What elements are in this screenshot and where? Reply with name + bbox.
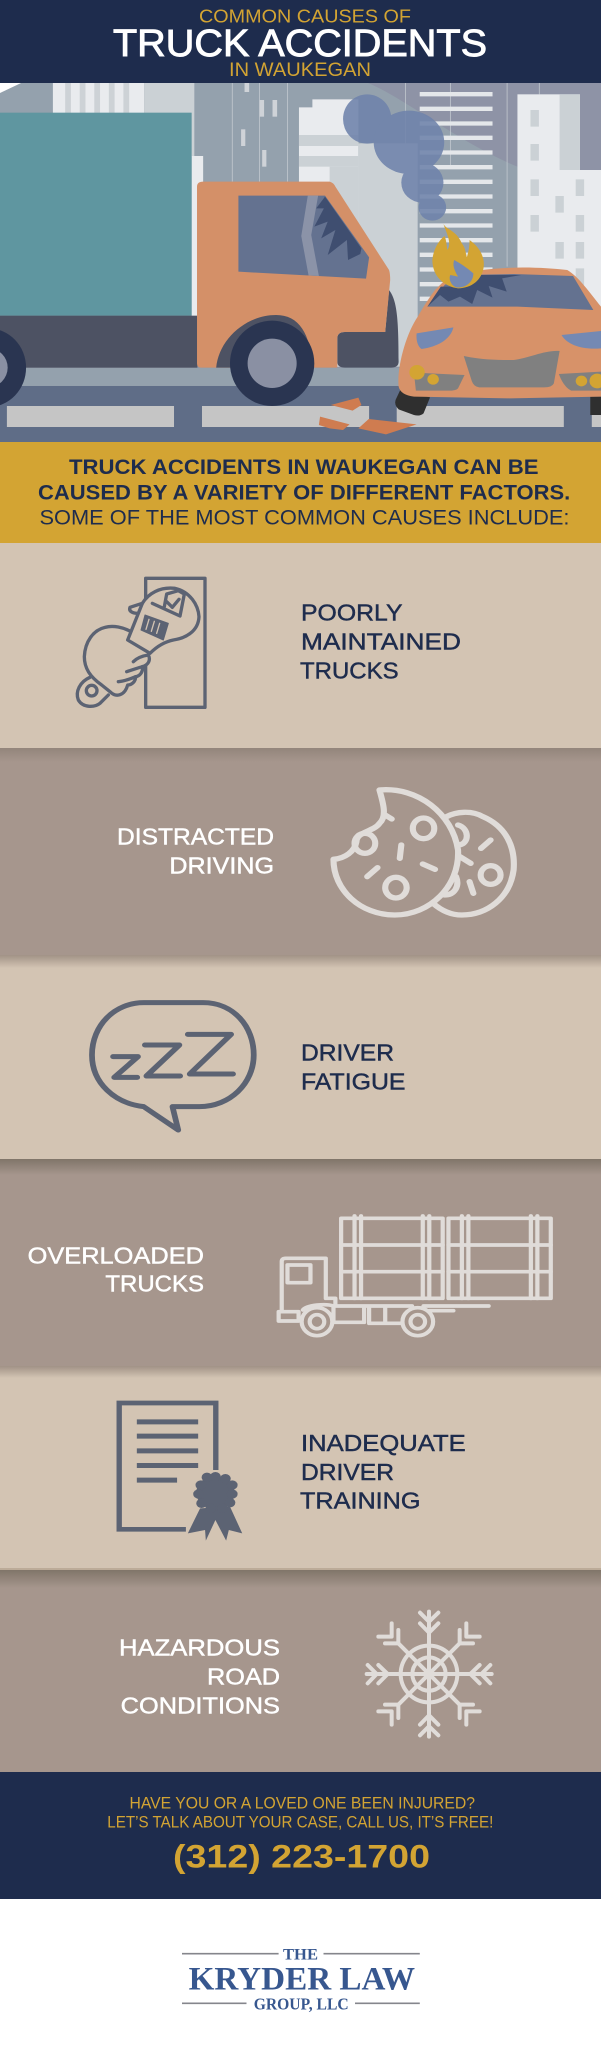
label: hazardous road conditions [119,1634,280,1718]
panel: hazardous road conditions [0,1570,601,1772]
label: overloaded trucks [28,1242,204,1296]
icon: hand with wrench [77,578,205,707]
call to action banner: LET’S TALK ABOUT YOUR CASE, CALL US, IT’S FREE! [107,1812,493,1831]
truck [0,113,399,407]
intro banner [0,442,601,543]
road [0,368,601,442]
panel: overloaded trucks [0,1159,601,1366]
label: hazardous road conditions: CONDITIONS [121,1692,280,1718]
hero illustration: truck and car collision [0,83,601,442]
logo: The Kryder Law Group, LLC: THE [283,1946,318,1963]
title header [0,0,601,83]
icon: snowflake [367,1612,492,1737]
intro banner: TRUCK ACCIDENTS IN WAUKEGAN CAN BE [69,455,538,479]
label: driver fatigue [301,1040,406,1094]
logo: The Kryder Law Group, LLC: KRYDER LAW [189,1961,415,1997]
title header: TRUCK ACCIDENTS [113,22,487,64]
panel: driver fatigue [0,955,601,1159]
logo: The Kryder Law Group, LLC: GROUP, LLC [254,1994,349,2013]
icon: sleep speech bubble [92,1003,254,1130]
intro banner: SOME OF THE MOST COMMON CAUSES INCLUDE: [40,505,570,529]
label: poorly maintained trucks [300,599,461,683]
label: overloaded trucks: TRUCKS [105,1270,204,1296]
label: driver fatigue: DRIVER [301,1040,394,1066]
label: poorly maintained trucks: POORLY [301,599,402,625]
label: distracted driving: DRIVING [169,852,274,878]
car [395,268,601,416]
label: distracted driving [117,823,274,878]
intro banner: CAUSED BY A VARIETY OF DIFFERENT FACTORS. [38,480,570,504]
label: inadequate driver training: TRAINING [300,1488,420,1514]
label: overloaded trucks: OVERLOADED [28,1242,204,1268]
flame [432,224,484,288]
debris [319,398,417,434]
panel: inadequate driver training [0,1366,601,1570]
label: inadequate driver training: DRIVER [301,1459,394,1485]
label: driver fatigue: FATIGUE [301,1068,406,1094]
title header: COMMON CAUSES OF [199,6,411,27]
call to action banner: HAVE YOU OR A LOVED ONE BEEN INJURED? [130,1794,475,1813]
title header: IN WAUKEGAN [229,60,371,81]
label: inadequate driver training: INADEQUATE [301,1430,466,1456]
icon: cookies [333,790,514,915]
label: hazardous road conditions: HAZARDOUS [119,1634,280,1660]
call to action banner: (312) 223-1700 [173,1837,430,1874]
panel: distracted driving [0,748,601,955]
icon: overloaded truck [279,1216,551,1336]
label: distracted driving: DISTRACTED [117,823,274,849]
label: poorly maintained trucks: TRUCKS [300,657,399,683]
logo: The Kryder Law Group, LLC [182,1946,420,2013]
label: poorly maintained trucks: MAINTAINED [301,628,461,654]
call to action banner [0,1772,601,1899]
icon: certificate with ribbon [119,1403,242,1541]
label: hazardous road conditions: ROAD [207,1664,280,1690]
smoke cloud [343,94,446,221]
label: inadequate driver training [300,1430,466,1514]
panel: poorly maintained trucks [0,543,601,748]
